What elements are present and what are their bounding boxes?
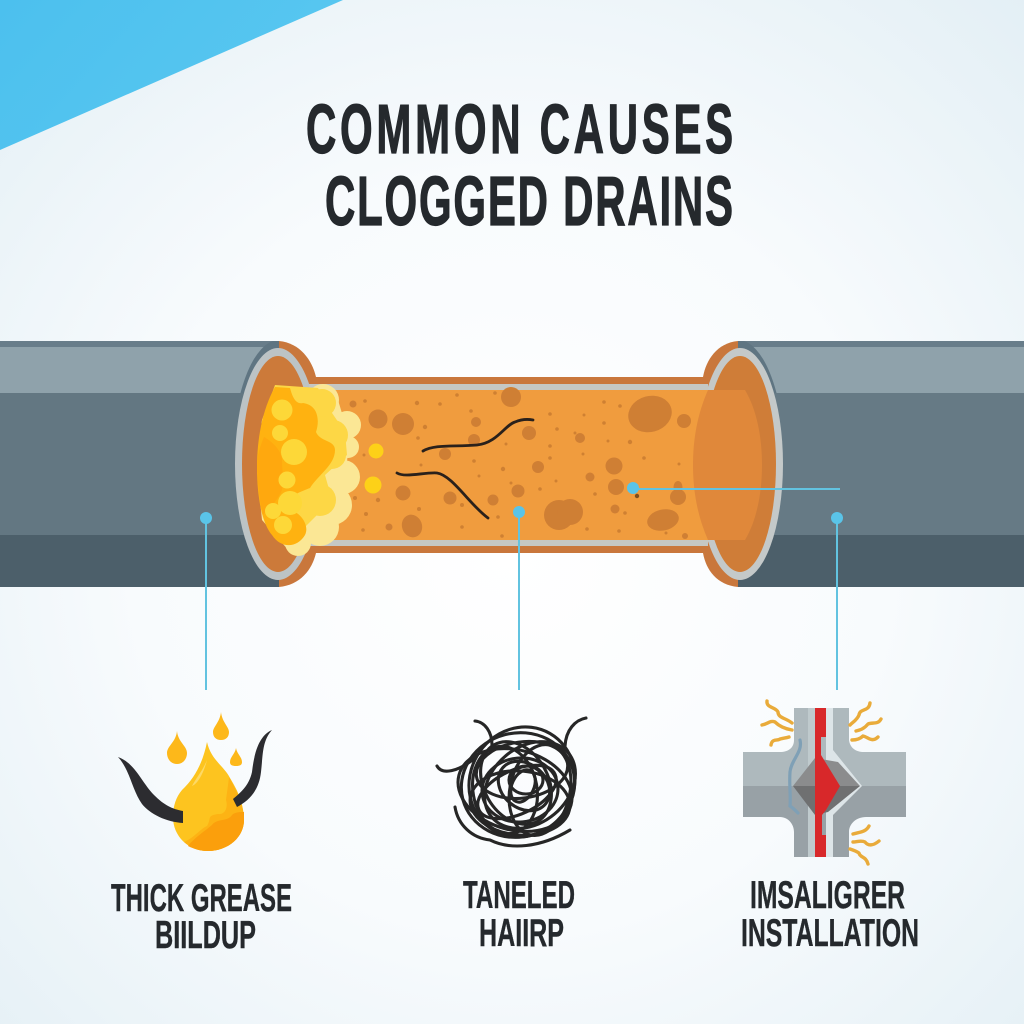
small drops	[167, 712, 242, 766]
red strip	[815, 708, 840, 857]
light channel right	[826, 708, 862, 857]
label: misaligned installation: INSTALLATION	[741, 912, 919, 955]
gray diamond upper	[793, 758, 860, 786]
darker grease left	[257, 437, 283, 515]
large drop	[173, 742, 244, 851]
drop highlight	[192, 760, 207, 786]
darker inner lens at right end	[693, 390, 762, 540]
label: misaligned installation	[741, 874, 919, 955]
left pipe opening	[235, 348, 321, 580]
leader line: grease	[200, 512, 212, 690]
label: misaligned installation: IMSALIGRER	[750, 874, 905, 917]
cross body lower	[743, 786, 906, 857]
grease clog	[257, 384, 384, 556]
sludge spots	[350, 387, 691, 540]
warning squiggles	[762, 701, 881, 864]
left copper flare	[279, 341, 316, 587]
cutaway pipe diagram	[0, 340, 1024, 588]
title: COMMON CAUSES	[306, 91, 733, 169]
corner accent triangle	[0, 0, 343, 150]
small sludge specks	[353, 391, 680, 538]
label: thick grease buildup: BIILDUP	[155, 914, 256, 957]
pale outer grease	[257, 384, 361, 556]
title	[306, 91, 733, 241]
leader line: misaligned	[831, 512, 843, 690]
leader line: hair	[513, 506, 525, 690]
right copper flare	[703, 341, 738, 587]
label: tangled hair: HAIIRP	[479, 912, 564, 955]
leader line: pipe callout horizontal	[627, 482, 840, 494]
right pipe opening	[697, 348, 783, 580]
label: tangled hair: TANELED	[463, 874, 575, 917]
escaped grease drops	[368, 444, 384, 458]
tube wall	[309, 377, 708, 553]
label: tangled hair	[463, 874, 575, 955]
cross body upper	[743, 708, 906, 786]
blue crack	[790, 740, 800, 813]
icon: misaligned pipe fitting	[743, 701, 906, 864]
mid yellow grease	[257, 385, 348, 542]
label: thick grease buildup: THICK GREASE	[111, 877, 292, 920]
icon: tangled hair	[437, 708, 595, 856]
hair strands in pipe	[397, 419, 533, 518]
orange grease core	[257, 387, 335, 545]
tube interior	[290, 390, 714, 540]
label: thick grease buildup	[111, 877, 292, 957]
bright yellow grease	[265, 400, 307, 534]
hair strands	[118, 730, 272, 823]
light channel left	[808, 708, 815, 857]
right gray pipe	[738, 341, 1024, 587]
left gray pipe	[0, 341, 279, 587]
gray diamond lower	[793, 786, 860, 815]
icon: grease drop	[118, 712, 272, 851]
title: CLOGGED DRAINS	[325, 163, 733, 241]
